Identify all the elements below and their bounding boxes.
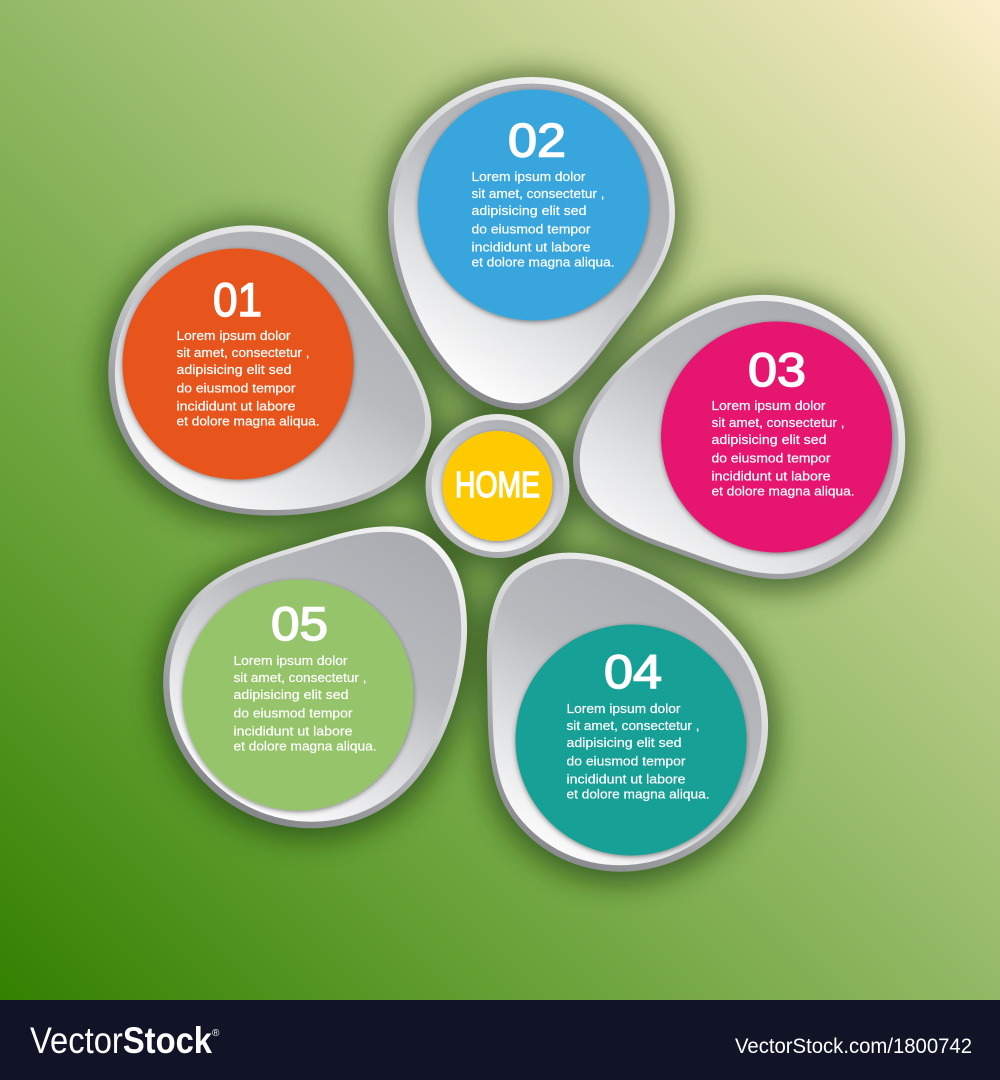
panel: 03 [538,260,941,633]
number 04: 04 [604,645,662,698]
text block 04 [566,701,710,802]
number 01: 01 [213,273,262,326]
text block 05 [234,653,376,754]
text block 02 [472,169,614,270]
text block 04: sit amet, consectetur , [566,718,700,733]
text block 02: et dolore magna aliqua. [472,254,614,270]
text block 01: adipisicing elit sed [176,362,292,377]
petal shadows [71,81,941,932]
text block 04: adipisicing elit sed [566,735,682,750]
text block 03 [712,398,854,498]
registered mark: ® [212,1028,220,1039]
text block 03: sit amet, consectetur , [712,415,844,430]
panel: 05 [108,446,537,884]
text block 04: et dolore magna aliqua. [566,786,710,802]
text block 04: do eiusmod tempor [566,754,686,768]
number 03: 03 [748,343,806,396]
text block 04: Lorem ipsum dolor [566,701,681,716]
text block 01: et dolore magna aliqua. [176,414,320,428]
text block 01: sit amet, consectetur , [176,345,310,360]
text block 02: adipisicing elit sed [472,203,586,218]
text block 02: do eiusmod tempor [472,222,591,236]
text block 03: Lorem ipsum dolor [712,398,826,413]
text block 05: Lorem ipsum dolor [234,653,348,668]
text block 03: adipisicing elit sed [712,432,826,447]
number 02: 02 [508,114,566,166]
text block 05: incididunt ut labore [234,724,352,738]
panel: 01 [71,190,477,565]
home label: HOME [455,464,540,505]
panel: 02 [388,77,675,410]
text block 02: sit amet, consectetur , [472,186,604,201]
text block 01: Lorem ipsum dolor [176,328,291,343]
text block 02: Lorem ipsum dolor [472,169,586,184]
text block 03: incididunt ut labore [712,468,830,484]
text block 01: incididunt ut labore [176,398,296,414]
footer id text: VectorStock.com/1800742 [735,1035,972,1058]
panel: home [426,414,570,558]
text block 01: do eiusmod tempor [176,380,296,396]
text block 02: incididunt ut labore [472,240,590,254]
text block 05: et dolore magna aliqua. [234,738,376,754]
text block 05: do eiusmod tempor [234,706,353,720]
text block 05: sit amet, consectetur , [234,670,366,685]
text block 05: adipisicing elit sed [234,687,348,702]
text block 04: incididunt ut labore [566,772,686,786]
number 05: 05 [271,597,328,650]
panel: 04 [393,489,824,928]
text block 01 [176,328,320,428]
text block 03: et dolore magna aliqua. [712,484,854,498]
footer logo: VectorStock [30,1020,212,1061]
text block 03: do eiusmod tempor [712,450,831,466]
footer bar [0,1000,1000,1080]
